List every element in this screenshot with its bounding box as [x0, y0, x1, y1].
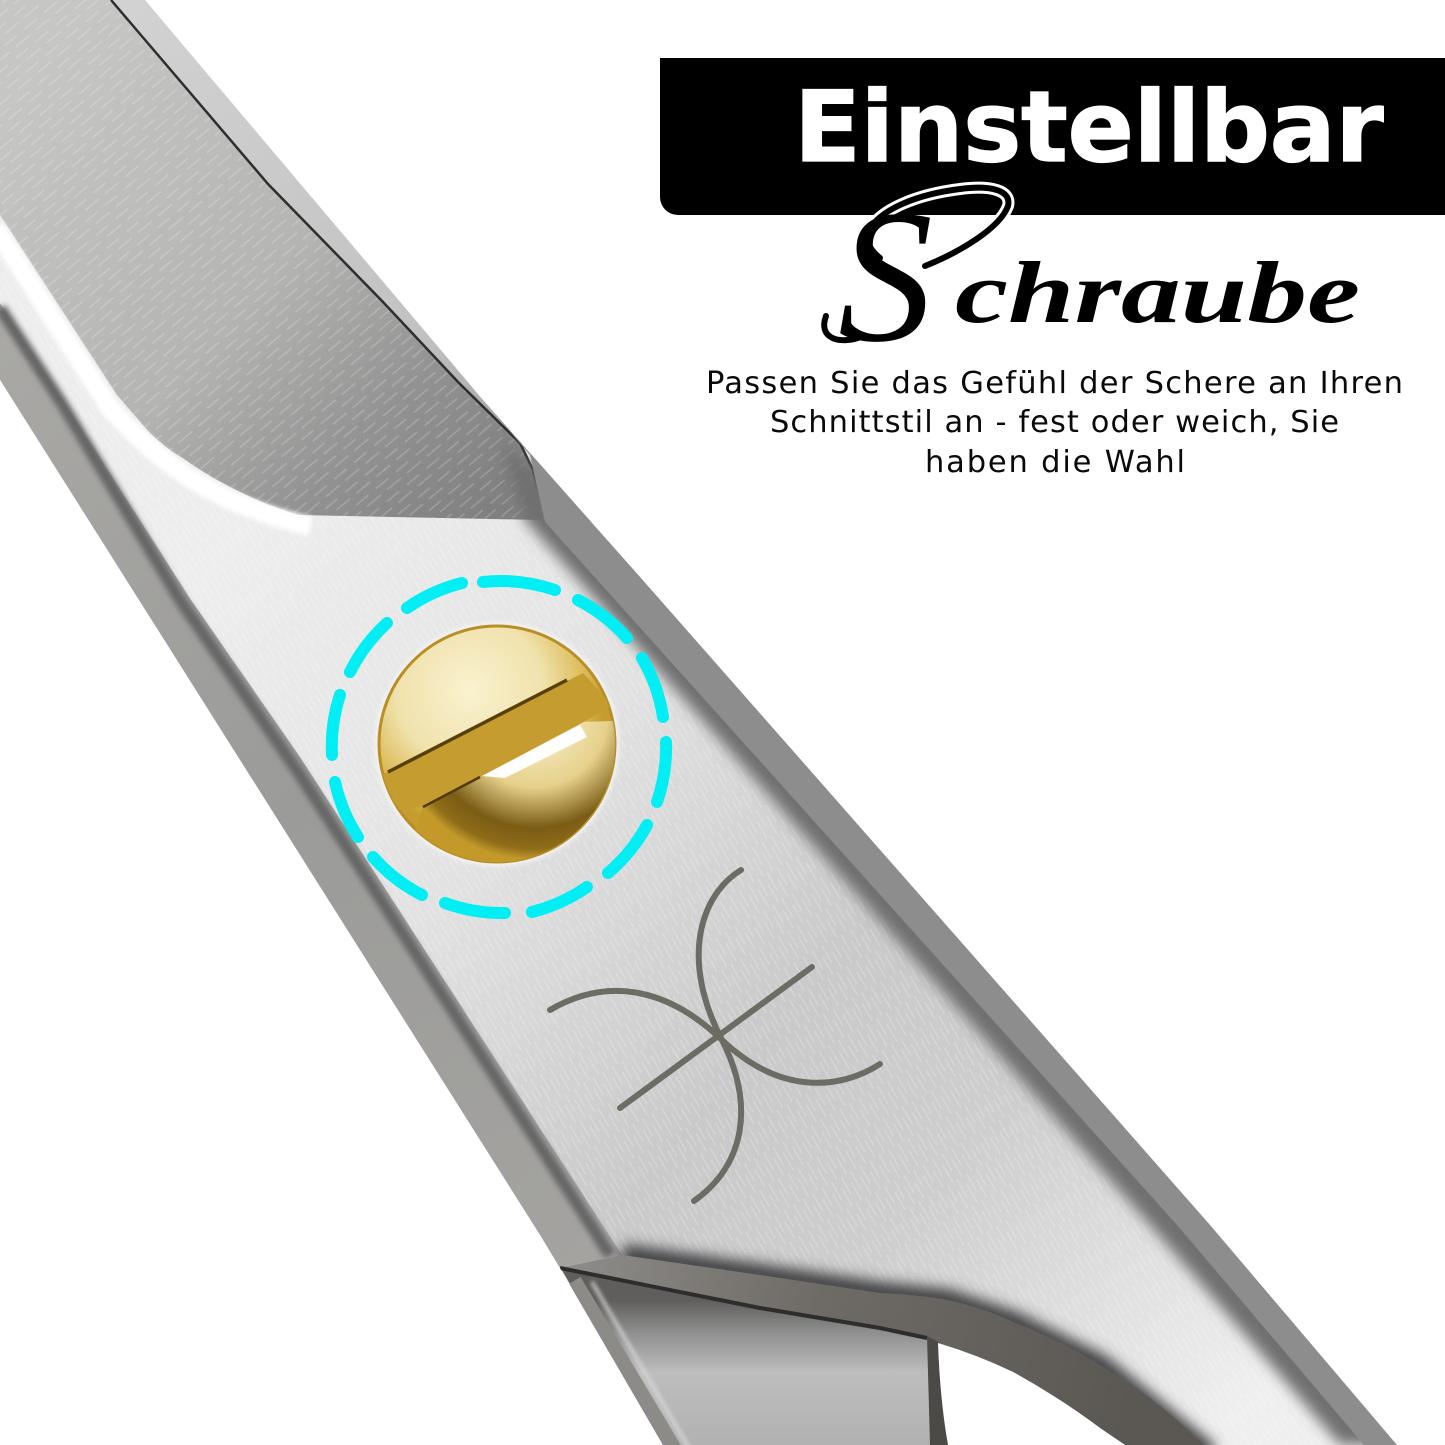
script flourish halo [868, 188, 1008, 266]
description text: Passen Sie das Gefühl der Schere an Ihren [706, 366, 1403, 401]
blade brushing [0, 0, 542, 520]
description text: haben die Wahl [925, 445, 1185, 480]
heading: Einstellbar [794, 71, 1383, 185]
screw head upper [379, 626, 615, 862]
right edge band [483, 400, 1397, 1445]
upper blade surface [0, 0, 542, 520]
screw slot [375, 673, 612, 810]
shadow above lower band [622, 1255, 1210, 1445]
description text: Schnittstil an - fest oder weich, Sie [770, 405, 1339, 440]
finger hole [938, 1343, 1125, 1445]
left edge band [0, 303, 622, 1268]
script word: S [838, 172, 933, 382]
lower dark band [560, 1255, 1203, 1445]
screw [375, 622, 620, 866]
pivot groove [560, 1268, 927, 1338]
cyan dashed highlight ring [332, 581, 666, 913]
lower slot edge [423, 777, 480, 807]
dark strip beside hole [927, 1336, 950, 1445]
white highlight along blade [0, 228, 310, 526]
face brushing [443, 714, 1138, 1320]
blade back line [111, 0, 542, 518]
lower blade [562, 1270, 932, 1445]
slot white glint [482, 725, 587, 778]
screw lower half [416, 721, 615, 862]
outer blade strip [100, 0, 600, 525]
script flourish [868, 188, 1008, 266]
engraved logo [550, 870, 880, 1201]
script tail flourish [824, 316, 858, 340]
black title banner [660, 58, 1445, 215]
lower blade bevel highlight [592, 1282, 690, 1445]
lower blade bevel [572, 1282, 672, 1445]
right edge shadow [500, 440, 1397, 1445]
script word: chraube [955, 245, 1360, 342]
screw recess [375, 622, 619, 866]
left edge dark inner shade [0, 308, 610, 1255]
slot dark edge [388, 680, 567, 772]
